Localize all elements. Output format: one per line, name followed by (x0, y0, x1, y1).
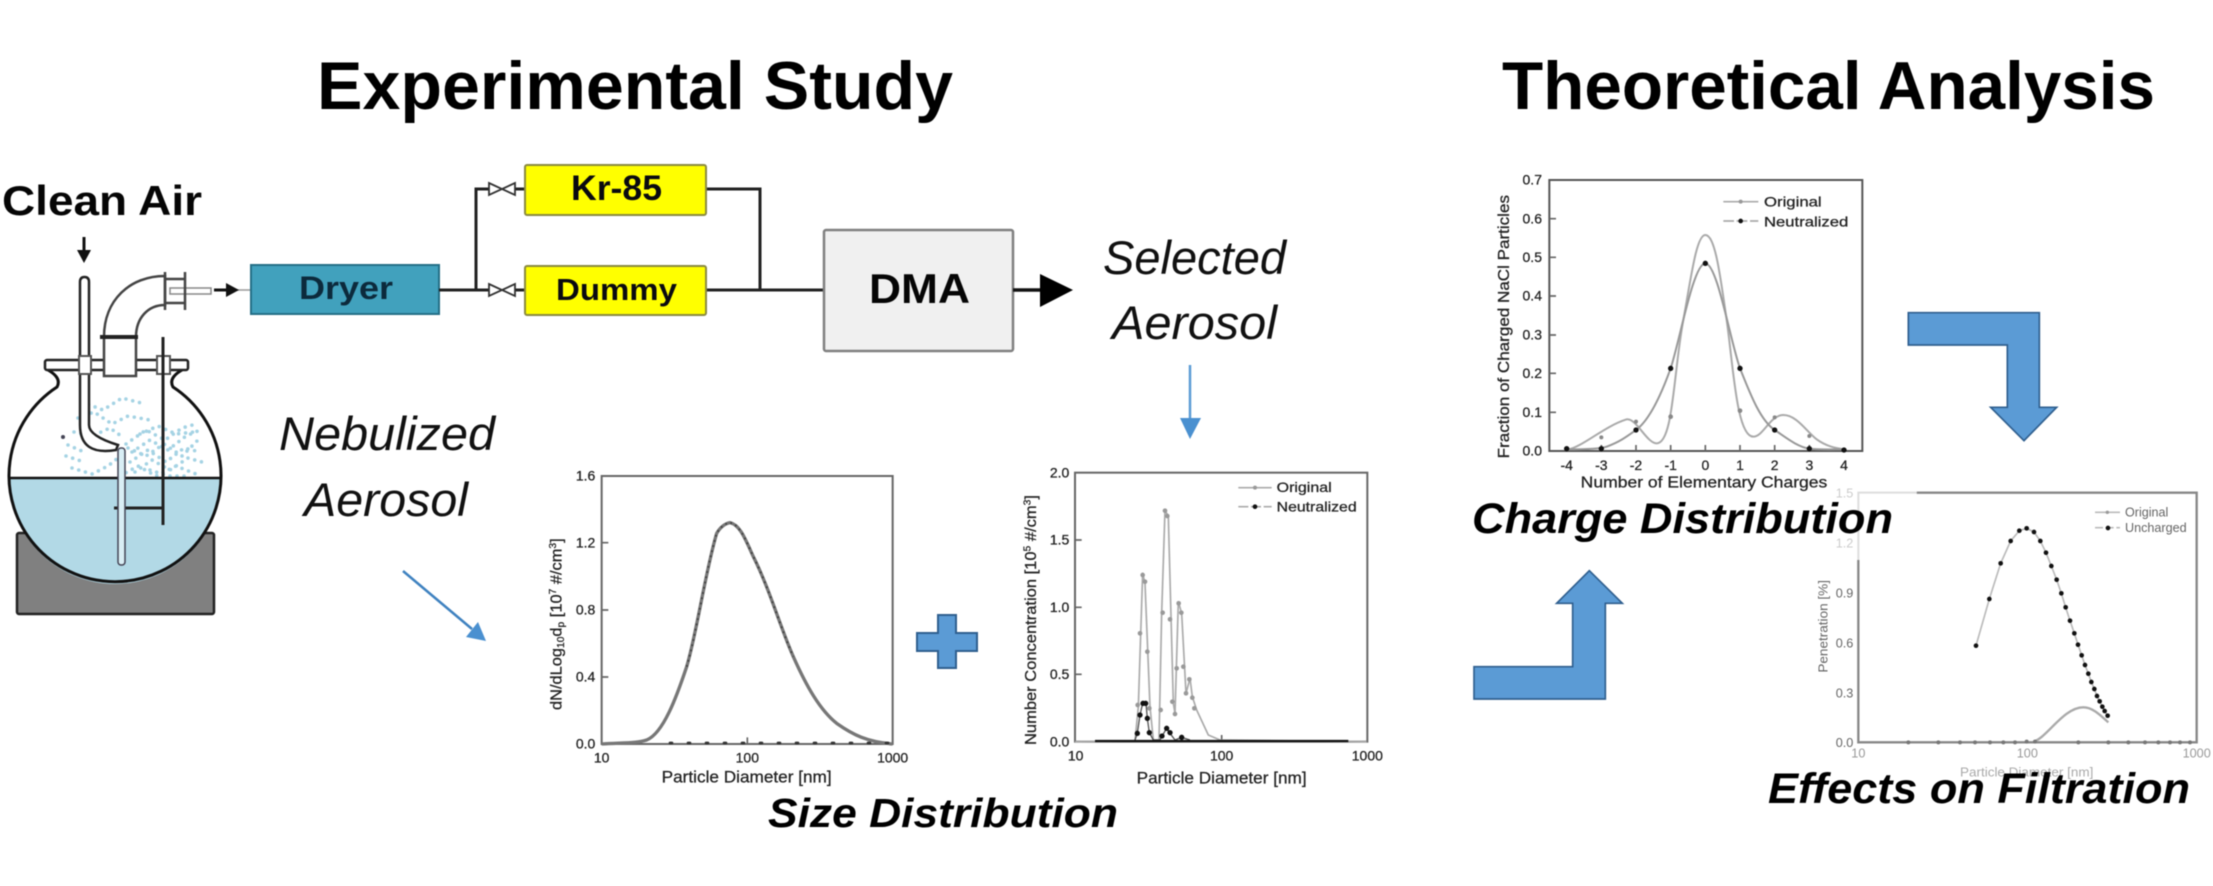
y axis title: #/cm (548, 549, 565, 589)
box: Kr-85 (525, 165, 706, 215)
y axis title: Penetration [%] (1815, 580, 1830, 673)
x ticks: 100 (2017, 747, 2038, 761)
legend: Original (1277, 479, 1332, 495)
chart frame (1858, 493, 2197, 742)
y axis title: #/cm (1023, 505, 1040, 546)
x ticks: 1000 (2183, 747, 2211, 761)
y ticks: 0.5 (1523, 249, 1542, 265)
y axis title: Number Concentration [10 (1023, 558, 1040, 745)
arrow: flask to dryer (214, 283, 250, 297)
chart: charge distribution (1496, 172, 1862, 492)
x ticks: 10 (594, 750, 610, 766)
x axis title: Number of Elementary Charges (1581, 475, 1827, 492)
title: Theoretical Analysis: Theoretical Analysis (1502, 48, 2155, 124)
axis ticks (602, 543, 747, 744)
y ticks: 0.4 (576, 668, 596, 684)
uncharged line (1976, 528, 2108, 716)
x ticks: -1 (1664, 457, 1677, 473)
label: Nebulized Aerosol (279, 407, 497, 526)
axis ticks (1549, 219, 1809, 451)
label: Nebulized Aerosol: Nebulized (279, 407, 497, 460)
box: Dummy (525, 266, 706, 315)
y axis title: 5 (1023, 545, 1034, 551)
y axis title: [10 (548, 594, 565, 622)
box: Dryer: Dryer (299, 270, 393, 306)
y axis title: 10 (556, 636, 567, 648)
y ticks: 1.5 (1836, 486, 1853, 500)
inlet tube (80, 277, 118, 451)
y ticks: 0.4 (1523, 288, 1542, 304)
y ticks: 0.6 (1523, 210, 1542, 226)
y ticks: 0.0 (576, 735, 596, 751)
flask outline (9, 370, 221, 582)
y ticks: 0.9 (1836, 586, 1853, 600)
y ticks: 0.5 (1050, 666, 1070, 682)
original markers (1135, 508, 1197, 716)
x ticks (594, 750, 908, 766)
x ticks: 4 (1840, 457, 1848, 473)
neutralized curve (1135, 703, 1190, 740)
box: DMA: DMA (869, 265, 970, 312)
x ticks: 10 (1068, 748, 1084, 764)
icon: plus (917, 615, 977, 668)
flask stand (17, 533, 214, 614)
original curve (1567, 235, 1844, 450)
y ticks: 0.3 (1523, 327, 1542, 343)
original markers (1599, 408, 1811, 439)
measurement rod (114, 337, 163, 525)
size distribution curve (602, 523, 893, 744)
y ticks: 0.1 (1523, 404, 1542, 420)
x ticks: -4 (1560, 457, 1573, 473)
y ticks (1836, 486, 1853, 750)
legend: Neutralized (1764, 213, 1848, 229)
y ticks: 0.6 (1836, 636, 1853, 650)
y ticks (1523, 172, 1542, 459)
arrow: clean air inlet (77, 237, 91, 263)
arrow: selected aerosol down (1180, 365, 1201, 439)
neutralized markers (1564, 261, 1847, 453)
label: Selected Aerosol: Aerosol (1109, 296, 1279, 349)
y ticks: 0.0 (1523, 443, 1542, 459)
liquid in flask (9, 478, 221, 584)
y ticks: 0.3 (1836, 686, 1853, 700)
x ticks: 3 (1805, 457, 1813, 473)
legend: Original (1764, 194, 1822, 210)
y ticks: 0.0 (1836, 736, 1853, 750)
neutralized markers (1135, 701, 1184, 740)
x ticks (1560, 457, 1848, 473)
y axis title: 3 (1023, 499, 1034, 505)
y ticks: 0.0 (1050, 733, 1070, 749)
original curve (2033, 707, 2108, 742)
baseline markers (670, 739, 892, 747)
legend: Neutralized (1277, 498, 1357, 514)
legend (1723, 194, 1848, 229)
axis ticks (1075, 540, 1222, 742)
y axis title: ] (548, 538, 565, 543)
arrow: bent up to charge distribution (1474, 571, 1622, 699)
heading: Effects on Filtration: Effects on Filtration (1768, 765, 2190, 813)
x ticks: 1000 (1352, 748, 1383, 764)
label: Selected Aerosol: Selected (1103, 231, 1288, 284)
arrow: DMA output (1013, 274, 1073, 307)
x ticks (1851, 747, 2211, 761)
x ticks: -3 (1595, 457, 1608, 473)
inner tube (118, 448, 125, 565)
nebulizer flask (9, 272, 221, 614)
box: Dummy: Dummy (556, 272, 678, 307)
arrow: nebulized aerosol diagonal (403, 571, 486, 641)
label: Clean Air: Clean Air (2, 177, 202, 224)
connecting lines (439, 189, 824, 290)
y axis title: ] (1023, 495, 1040, 500)
y ticks: 1.5 (1050, 532, 1070, 548)
elbow outlet (100, 272, 211, 376)
stopper squares (79, 356, 170, 374)
y ticks: 1.2 (576, 534, 596, 550)
aerosol droplets (66, 398, 202, 476)
valve: Dummy branch (489, 284, 515, 296)
label: Selected Aerosol (1103, 231, 1288, 349)
y ticks: 1.6 (576, 468, 596, 484)
flask cap bar (45, 360, 188, 370)
x ticks: 1000 (877, 750, 908, 766)
y ticks: 1.0 (1050, 599, 1070, 615)
neutralized baseline (1095, 737, 1348, 744)
y ticks: 0.7 (1523, 172, 1542, 188)
x axis title: Particle Diameter [nm] (1960, 765, 2093, 780)
x ticks (1068, 748, 1383, 764)
y axis title: dN/dLog (548, 650, 565, 710)
y axis title: 3 (548, 542, 559, 549)
label: Nebulized Aerosol: Aerosol (301, 473, 470, 526)
arrow: bent down to filtration (1908, 313, 2057, 441)
y ticks (576, 468, 596, 751)
liquid level line (9, 477, 221, 479)
original curve (1075, 510, 1367, 742)
neutralized curve (1567, 263, 1844, 449)
x axis title: Particle Diameter [nm] (1137, 768, 1307, 787)
x ticks: 100 (1210, 748, 1234, 764)
baseline markers (1906, 740, 2192, 744)
box: Dryer (251, 265, 439, 314)
y axis title: 7 (548, 588, 559, 594)
legend: Original (2125, 506, 2168, 520)
chart: penetration effects on filtration (1815, 486, 2211, 780)
box: DMA (824, 230, 1013, 351)
x ticks: 2 (1771, 457, 1779, 473)
curve markers (687, 523, 793, 667)
x ticks: 100 (736, 750, 759, 766)
y ticks: 0.2 (1523, 365, 1542, 381)
box: Kr-85: Kr-85 (571, 169, 662, 208)
chart: number size distribution (548, 468, 908, 787)
x axis title: Particle Diameter [nm] (662, 768, 832, 787)
valve: Kr-85 branch (489, 183, 515, 195)
heading: Size Distribution: Size Distribution (768, 790, 1118, 836)
x ticks: 0 (1701, 457, 1709, 473)
x ticks: -2 (1630, 457, 1642, 473)
y ticks: 2.0 (1050, 464, 1070, 480)
legend: Uncharged (2125, 521, 2187, 535)
y axis title: p (556, 621, 567, 627)
x ticks: 10 (1851, 747, 1865, 761)
x ticks: 1 (1736, 457, 1744, 473)
title: Experimental Study: Experimental Study (317, 48, 953, 124)
y ticks (1050, 464, 1070, 749)
y axis title: Fraction of Charged NaCl Particles (1496, 195, 1513, 458)
legend (2095, 506, 2187, 535)
y ticks: 0.8 (576, 601, 596, 617)
uncharged markers (1974, 526, 2110, 718)
y ticks: 1.2 (1836, 536, 1853, 550)
y axis title: d (548, 627, 565, 637)
heading: Charge Distribution: Charge Distribution (1472, 495, 1893, 543)
legend (1238, 479, 1357, 514)
chart: original vs neutralized concentration (1023, 464, 1383, 787)
